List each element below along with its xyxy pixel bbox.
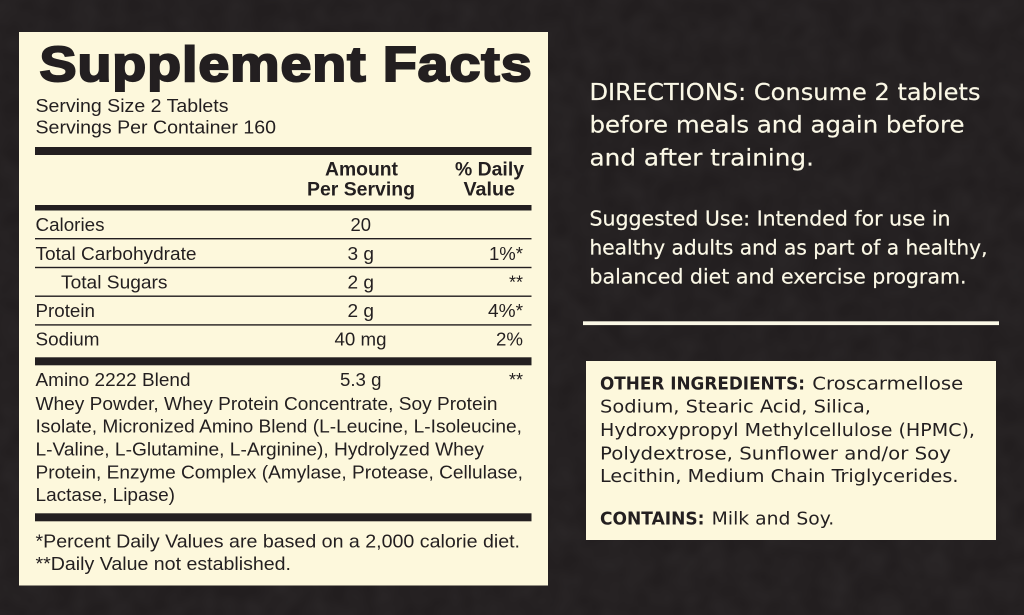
- blend ingredients text: Protein, Enzyme Complex (Amylase, Protease, Cellulase,: [36, 461, 523, 482]
- contains text: Milk and Soy.: [712, 510, 834, 530]
- serving information: Serving Size 2 Tablets: [36, 95, 229, 116]
- other ingredients text: OTHER INGREDIENTS:: [600, 374, 805, 394]
- other ingredients text: [600, 374, 975, 487]
- row: sodium: [36, 328, 523, 350]
- blend ingredients text: Lactase, Lipase): [36, 484, 175, 505]
- row: total carbohydrate: 3 g: [348, 243, 374, 264]
- blend ingredients text: [36, 393, 523, 505]
- row: total carbohydrate: 1%*: [489, 243, 523, 264]
- panel: other ingredients: [586, 361, 996, 540]
- row: calories: 20: [350, 214, 371, 235]
- text block: suggested use: healthy adults and as part of a healthy,: [590, 236, 988, 260]
- text block: suggested use: [590, 206, 988, 288]
- footnotes: [36, 530, 520, 574]
- row: Amino 2222 Blend: [36, 369, 523, 390]
- row: total carbohydrate: Total Carbohydrate: [36, 243, 196, 264]
- text block: directions: before meals and again before: [590, 113, 964, 139]
- text block: directions: DIRECTIONS: Consume 2 tablets: [590, 80, 980, 106]
- row: sodium: 2%: [496, 328, 523, 350]
- row: total sugars: [61, 272, 523, 292]
- text block: directions: [590, 80, 980, 171]
- column header: amount per serving: [307, 160, 415, 200]
- row: sodium: Sodium: [36, 328, 100, 350]
- row: protein: 2 g: [348, 300, 374, 321]
- row: protein: 4%*: [488, 300, 523, 321]
- serving information: [36, 95, 276, 138]
- row: Amino 2222 Blend: Amino 2222 Blend: [36, 369, 190, 390]
- other ingredients text: Hydroxypropyl Methylcellulose (HPMC),: [600, 421, 975, 441]
- row: total sugars: 2 g: [348, 272, 374, 292]
- column header: percent daily value: % Daily: [455, 160, 524, 180]
- row: total sugars: **: [509, 272, 523, 292]
- footnotes: **Daily Value not established.: [36, 553, 291, 574]
- serving information: Servings Per Container 160: [36, 116, 276, 138]
- heading: Supplement Facts: Supplement Facts: [40, 38, 532, 92]
- panel: supplement facts label: [19, 32, 548, 586]
- row: calories: [36, 214, 371, 235]
- row: protein: Protein: [36, 300, 95, 321]
- other ingredients text: Polydextrose, Sunflower and/or Soy: [600, 444, 951, 464]
- blend ingredients text: Isolate, Micronized Amino Blend (L-Leucine, L-Isoleucine,: [36, 416, 522, 437]
- text block: directions: and after training.: [590, 145, 814, 171]
- row: sodium: 40 mg: [334, 328, 386, 350]
- column header: percent daily value: Value: [464, 180, 515, 200]
- row: calories: Calories: [36, 214, 104, 235]
- other ingredients text: Croscarmellose: [812, 374, 963, 394]
- text block: suggested use: Suggested Use: Intended for use in: [590, 206, 950, 230]
- footnotes: *Percent Daily Values are based on a 2,000 calorie diet.: [36, 530, 520, 551]
- row: Amino 2222 Blend: 5.3 g: [340, 369, 382, 390]
- contains text: [600, 510, 834, 530]
- row: total carbohydrate: [36, 243, 523, 264]
- row: Amino 2222 Blend: **: [509, 369, 523, 390]
- column header: amount per serving: Amount: [325, 160, 399, 180]
- column header: percent daily value: [455, 160, 524, 200]
- text block: suggested use: balanced diet and exercise program.: [590, 264, 966, 288]
- blend ingredients text: Whey Powder, Whey Protein Concentrate, Soy Protein: [36, 393, 498, 414]
- blend ingredients text: L-Valine, L-Glutamine, L-Arginine), Hydrolyzed Whey: [36, 438, 485, 459]
- row: protein: [36, 300, 523, 321]
- row: total sugars: Total Sugars: [61, 272, 168, 292]
- contains text: CONTAINS:: [600, 510, 704, 530]
- column header: amount per serving: Per Serving: [307, 180, 415, 200]
- other ingredients text: Sodium, Stearic Acid, Silica,: [600, 398, 871, 418]
- other ingredients text: Lecithin, Medium Chain Triglycerides.: [600, 467, 958, 487]
